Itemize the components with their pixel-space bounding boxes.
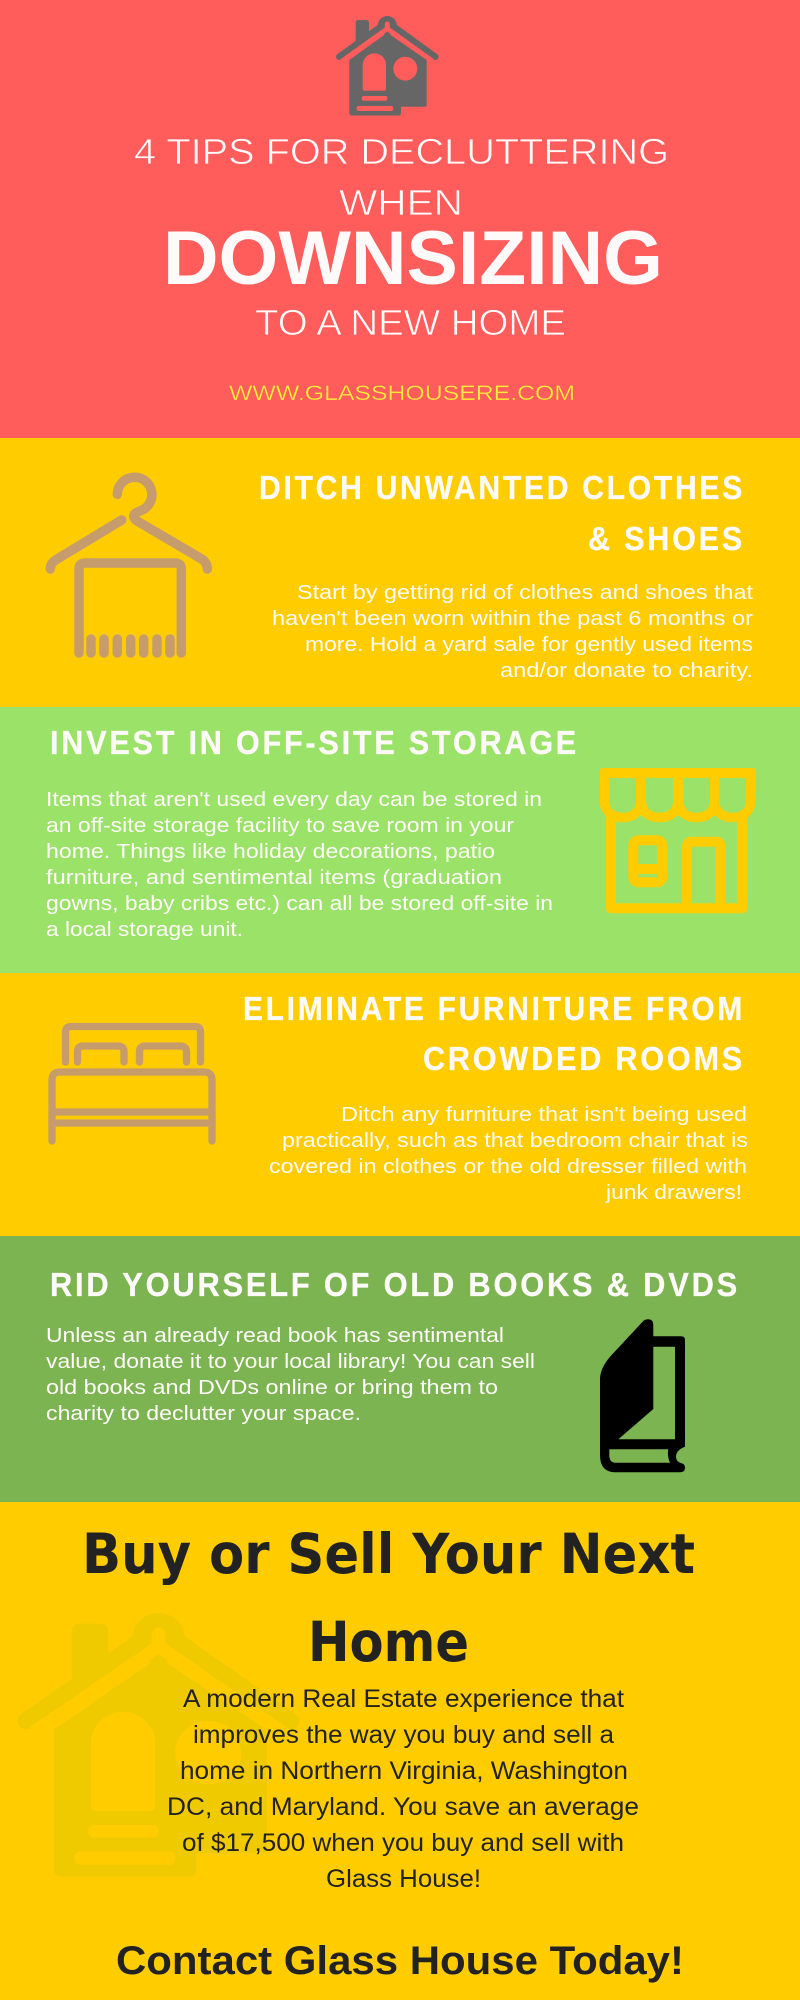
body text: tip 1: and/or donate to charity. bbox=[500, 659, 753, 682]
body text: glass house pitch: Glass House! bbox=[326, 1865, 481, 1893]
heading: buy or sell your next home: Buy or Sell Your Next bbox=[82, 1522, 695, 1586]
body text: tip 2: home. Things like holiday decorations, patio bbox=[46, 840, 495, 863]
panel: tip 2 storage bbox=[0, 707, 800, 973]
title line: 4 tips for decluttering: 4 TIPS FOR DECLUTTERING bbox=[134, 131, 669, 172]
watermark: house bbox=[27, 1613, 291, 1877]
panel: tip 3 furniture bbox=[0, 973, 800, 1236]
panel: tip 4 books bbox=[0, 1236, 800, 1502]
body text: glass house pitch: A modern Real Estate experience that bbox=[183, 1685, 624, 1713]
body text: tip 4: value, donate it to your local library! You can sell bbox=[46, 1350, 535, 1373]
title line: downsizing: DOWNSIZING bbox=[163, 216, 663, 301]
body text: tip 3: covered in clothes or the old dresser filled with bbox=[269, 1155, 747, 1178]
body text: tip 4: old books and DVDs online or bring them to bbox=[46, 1376, 498, 1399]
body text: tip 1: Start by getting rid of clothes and shoes that bbox=[297, 581, 753, 604]
body text: tip 1: haven't been worn within the past 6 months or bbox=[272, 607, 753, 630]
icon: book bbox=[600, 1319, 685, 1472]
title line: when: WHEN bbox=[339, 182, 463, 223]
heading: ditch unwanted clothes and shoes bbox=[259, 469, 745, 557]
heading: ditch unwanted clothes and shoes: & SHOES bbox=[588, 520, 745, 557]
body text: tip 1 bbox=[272, 581, 753, 682]
icon: house bbox=[339, 16, 435, 116]
body text: glass house pitch: home in Northern Virginia, Washington bbox=[180, 1757, 628, 1785]
panel: header bbox=[0, 0, 800, 438]
body text: tip 2: Items that aren't used every day can be stored in bbox=[46, 788, 542, 811]
website url: WWW.GLASSHOUSERE.COM bbox=[229, 382, 575, 405]
heading: eliminate furniture from crowded rooms: CROWDED ROOMS bbox=[423, 1040, 745, 1077]
body text: tip 2: gowns, baby cribs etc.) can all be stored off-site in bbox=[46, 892, 553, 915]
body text: tip 3 bbox=[269, 1103, 748, 1204]
body text: glass house pitch bbox=[167, 1685, 639, 1893]
heading: ditch unwanted clothes and shoes: DITCH UNWANTED CLOTHES bbox=[259, 469, 745, 506]
body text: tip 2 bbox=[46, 788, 553, 941]
body text: tip 4: charity to declutter your space. bbox=[46, 1402, 361, 1425]
body text: tip 2: an off-site storage facility to save room in your bbox=[46, 814, 514, 837]
heading: invest in off-site storage: INVEST IN OFF-SITE STORAGE bbox=[50, 724, 579, 761]
body text: tip 2: furniture, and sentimental items (graduation bbox=[46, 866, 502, 889]
body text: tip 3: practically, such as that bedroom chair that is bbox=[282, 1129, 748, 1152]
heading: eliminate furniture from crowded rooms: ELIMINATE FURNITURE FROM bbox=[243, 990, 745, 1027]
body text: tip 4: Unless an already read book has sentimental bbox=[46, 1324, 504, 1347]
body text: tip 4 bbox=[46, 1324, 535, 1425]
icon: bed bbox=[52, 1026, 212, 1141]
body text: glass house pitch: of $17,500 when you buy and sell with bbox=[182, 1829, 624, 1857]
panel: tip 1 clothes bbox=[0, 438, 800, 707]
heading: buy or sell your next home bbox=[82, 1522, 695, 1674]
heading: rid yourself of old books and dvds: RID YOURSELF OF OLD BOOKS & DVDS bbox=[50, 1266, 740, 1303]
heading: eliminate furniture from crowded rooms bbox=[243, 990, 745, 1077]
body text: glass house pitch: improves the way you buy and sell a bbox=[193, 1721, 614, 1749]
body text: tip 2: a local storage unit. bbox=[46, 918, 243, 941]
body text: tip 1: more. Hold a yard sale for gently used items bbox=[305, 633, 753, 656]
body text: glass house pitch: DC, and Maryland. You save an average bbox=[167, 1793, 639, 1821]
panel: call to action bbox=[0, 1502, 800, 2000]
icon: hanger with towel bbox=[50, 477, 207, 653]
title line: to a new home: TO A NEW HOME bbox=[255, 302, 566, 343]
icon: storefront bbox=[600, 768, 756, 908]
body text: tip 3: junk drawers! bbox=[605, 1181, 742, 1204]
call to action: contact glass house today: Contact Glass House Today! bbox=[116, 1939, 684, 1983]
body text: tip 3: Ditch any furniture that isn't being used bbox=[341, 1103, 747, 1126]
heading: buy or sell your next home: Home bbox=[308, 1610, 469, 1674]
